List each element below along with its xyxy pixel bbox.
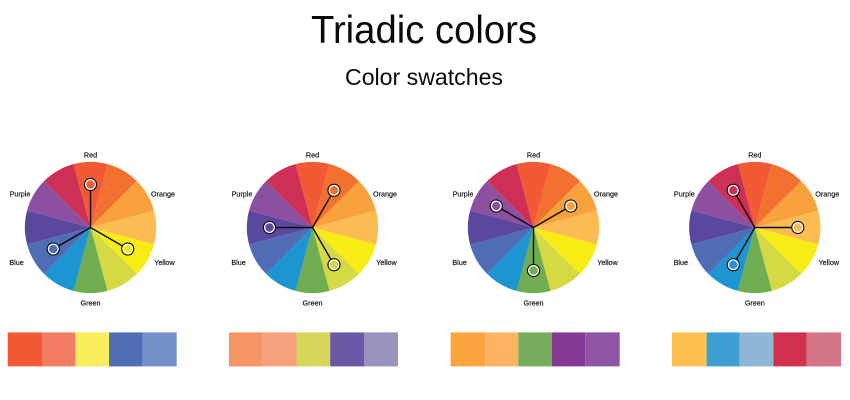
subtitle: Color swatches: [345, 64, 503, 90]
color wheel 2: orange-red, yellow-green, indigo: Yellow: [376, 258, 398, 267]
color wheel 1: red, yellow, blue: Blue: [9, 258, 24, 267]
swatch strip 2: [229, 332, 398, 366]
color wheel 4: yellow-orange, sky blue, crimson: Red: [748, 150, 761, 160]
color wheel 1: red, yellow, blue: Purple: [10, 190, 30, 198]
swatch strip 3: [451, 332, 620, 366]
color wheel 4: yellow-orange, sky blue, crimson: Green: [745, 298, 765, 308]
color wheel 1: red, yellow, blue: Orange: [151, 190, 175, 198]
color wheel 2: orange-red, yellow-green, indigo: Red: [306, 150, 319, 160]
color wheel 2: orange-red, yellow-green, indigo: Orange: [373, 190, 397, 198]
color wheel 2: orange-red, yellow-green, indigo: [231, 150, 398, 308]
color wheel 4: yellow-orange, sky blue, crimson: Yellow: [819, 258, 840, 267]
color wheel 2: orange-red, yellow-green, indigo: Purple: [232, 190, 252, 198]
color wheel 4: yellow-orange, sky blue, crimson: [674, 150, 840, 308]
color wheel 3: orange, green, purple: Red: [527, 150, 540, 160]
swatch strip 1: [8, 332, 177, 366]
color wheel 1: red, yellow, blue: Yellow: [154, 258, 176, 267]
color wheel 3: orange, green, purple: Orange: [594, 190, 618, 198]
color wheel 1: red, yellow, blue: Red: [84, 150, 97, 160]
color wheel 2: orange-red, yellow-green, indigo: Blue: [231, 258, 246, 267]
color wheel 4: yellow-orange, sky blue, crimson: Orange: [815, 190, 839, 198]
color wheel 3: orange, green, purple: Yellow: [597, 258, 619, 267]
color wheel 3: orange, green, purple: [452, 150, 619, 308]
color wheel 3: orange, green, purple: Green: [524, 298, 543, 308]
color wheel 4: yellow-orange, sky blue, crimson: Purple: [674, 190, 695, 198]
color wheel 1: red, yellow, blue: [9, 150, 176, 308]
color wheel 2: orange-red, yellow-green, indigo: Green: [303, 298, 322, 308]
color wheel 1: red, yellow, blue: Green: [81, 298, 100, 308]
title: Triadic colors: [311, 9, 537, 52]
color wheel 4: yellow-orange, sky blue, crimson: Blue: [674, 258, 688, 267]
color wheel 3: orange, green, purple: Purple: [453, 190, 473, 198]
swatch strip 4: [672, 332, 841, 366]
color wheel 3: orange, green, purple: Blue: [452, 258, 467, 267]
